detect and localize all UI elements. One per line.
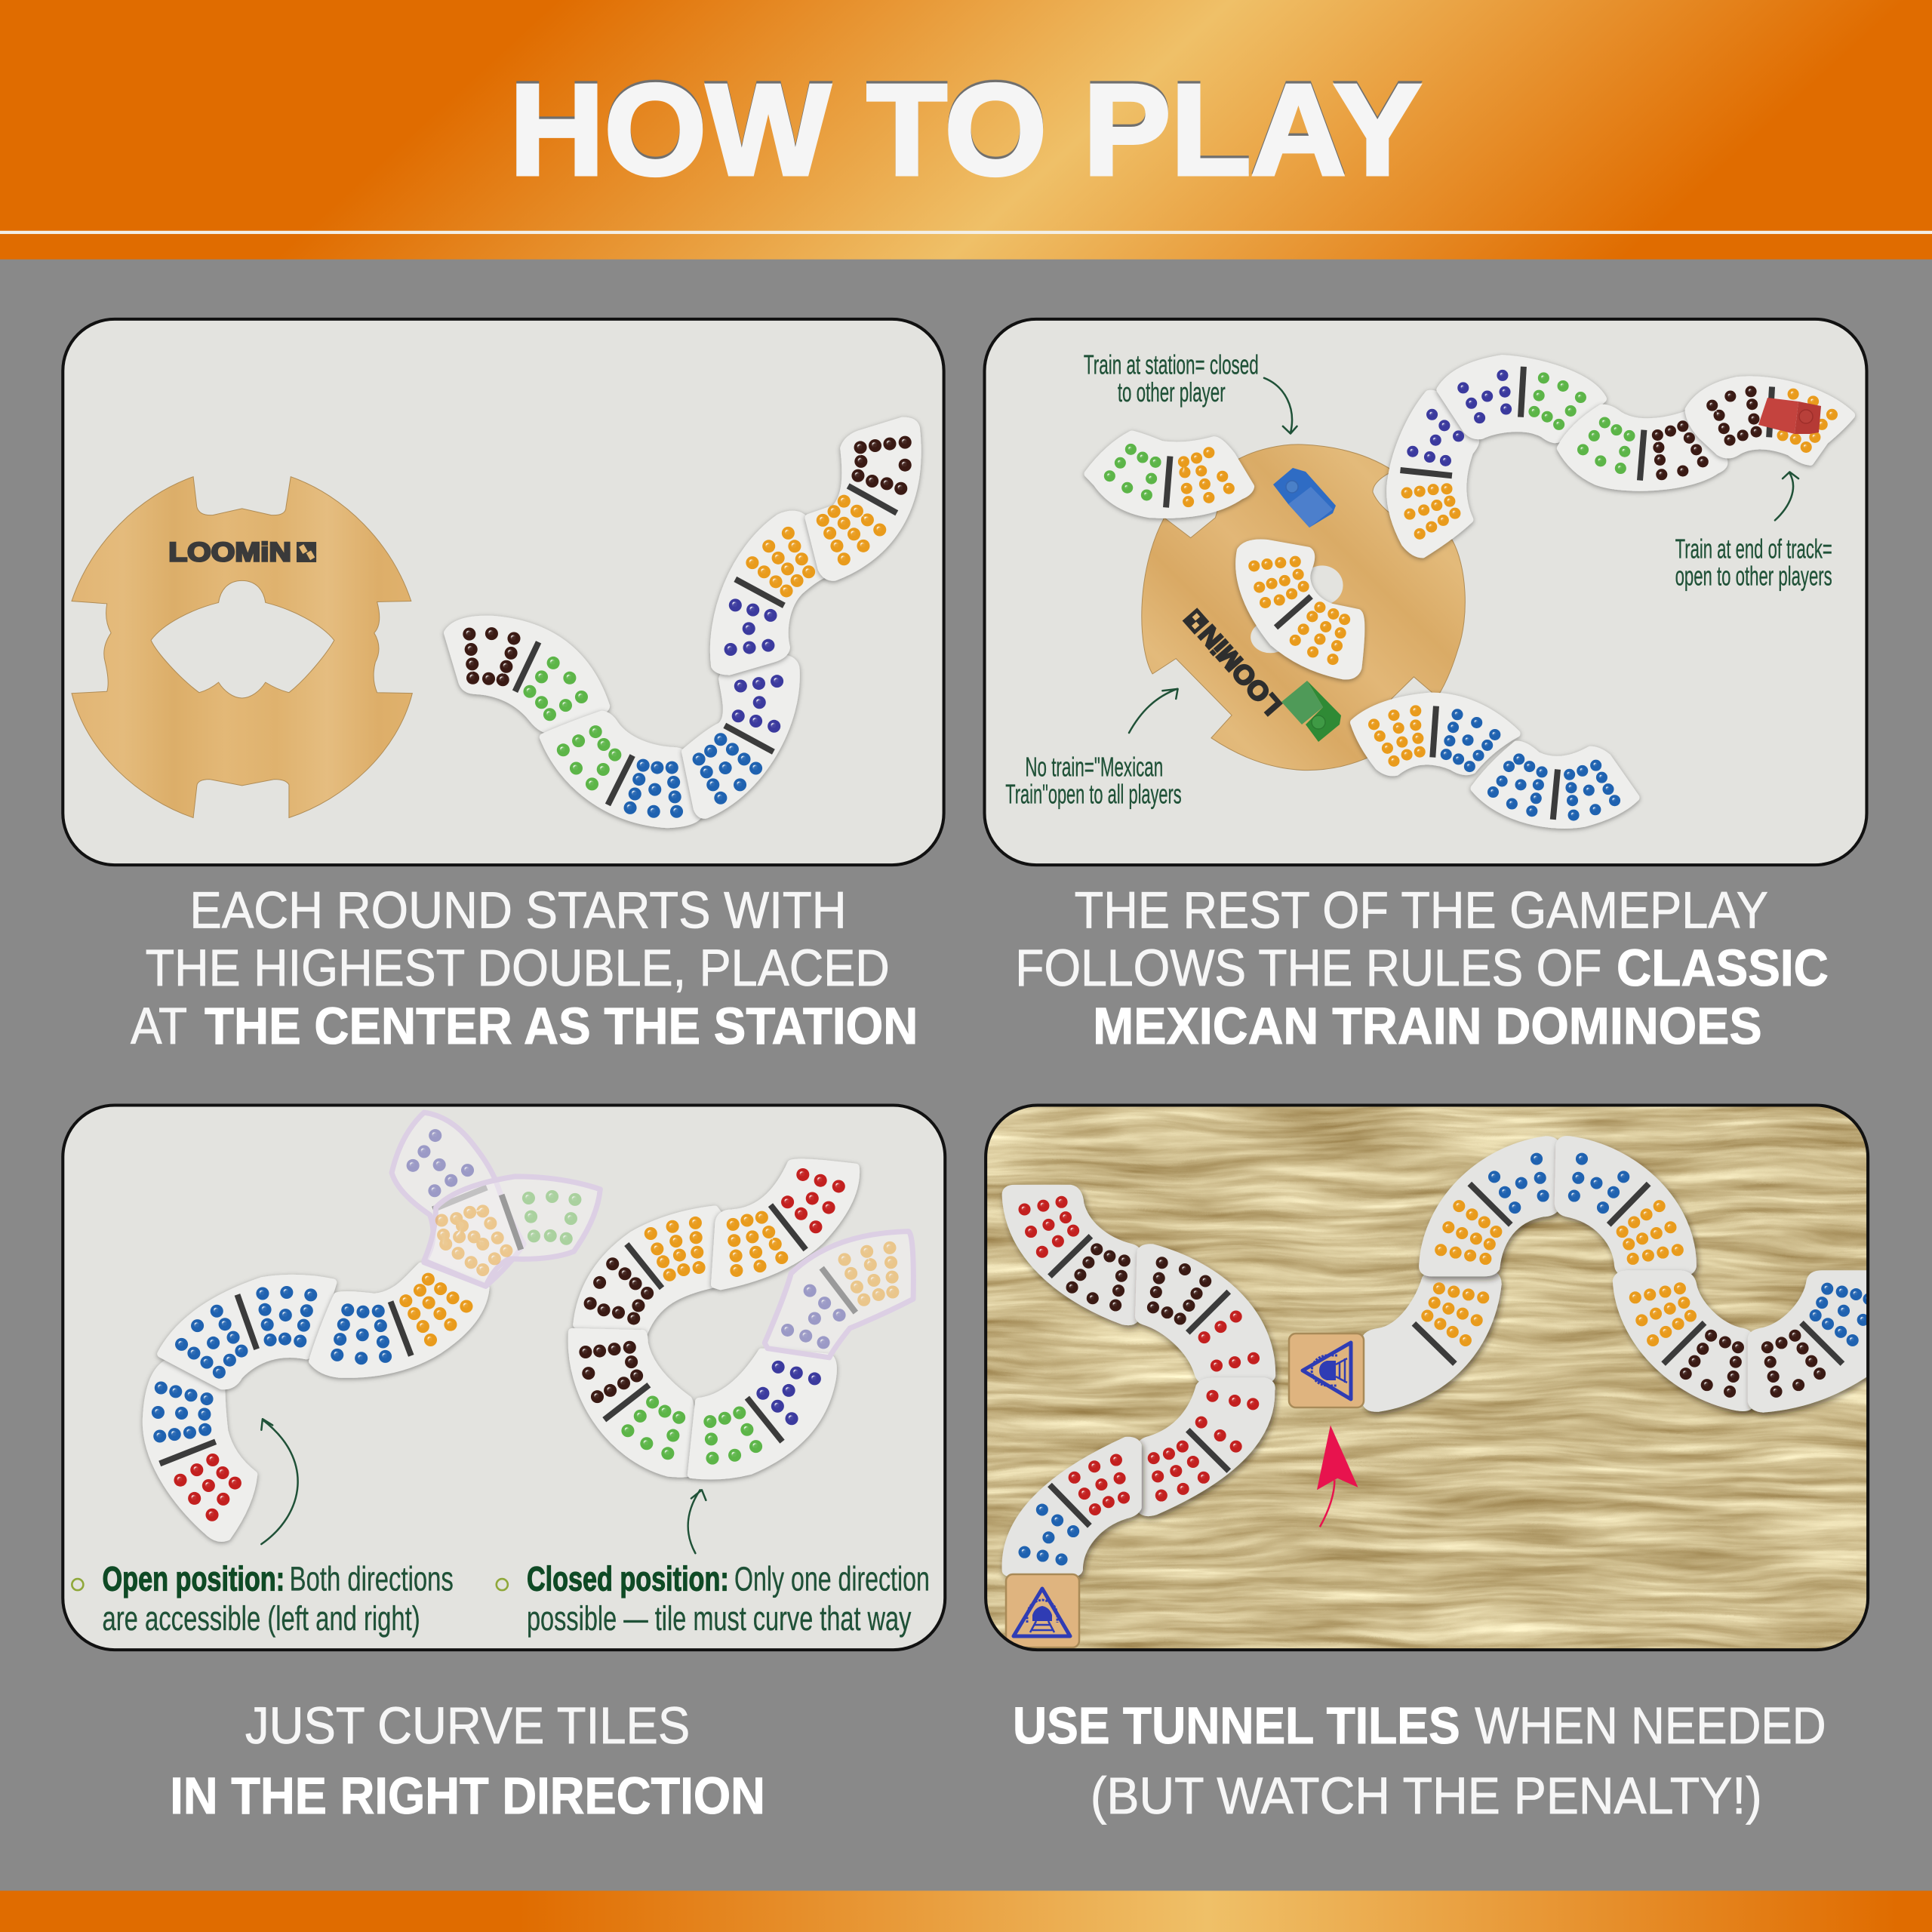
caption: panel 2: CLASSIC bbox=[1617, 939, 1829, 997]
panel: gameplay with trains bbox=[984, 319, 1866, 865]
tile: brown and green bbox=[448, 620, 606, 730]
text: open position: are accessible (left and right) bbox=[103, 1599, 420, 1638]
text: closed position: Only one direction bbox=[734, 1560, 930, 1598]
note: train at end of track: open to other players bbox=[1675, 561, 1832, 592]
text: closed position: possible — tile must curve that way bbox=[527, 1599, 911, 1638]
note: no train: No train="Mexican bbox=[1025, 752, 1163, 783]
ghost tiles: possible placements bbox=[392, 1112, 913, 1358]
caption: panel 2: FOLLOWS THE RULES OF bbox=[1015, 939, 1601, 997]
text: open position bbox=[103, 1560, 454, 1638]
tunnel tile: played bbox=[1289, 1334, 1364, 1407]
bullet: closed bbox=[497, 1579, 508, 1590]
ghost pips bbox=[413, 1136, 893, 1343]
tile: orange and red bbox=[715, 1162, 856, 1286]
panel: board and first tiles bbox=[63, 319, 944, 865]
bullet: open bbox=[72, 1579, 83, 1590]
tile: orange and blue bbox=[1354, 697, 1517, 772]
arrow: train at station bbox=[1264, 378, 1297, 434]
ghost tile: orange and green bbox=[424, 1177, 600, 1286]
tile: blue and red bbox=[146, 1364, 254, 1538]
arrow: no train bbox=[1129, 689, 1178, 733]
arrow: closed position bbox=[688, 1490, 706, 1553]
caption: panel 4 bbox=[1013, 1697, 1826, 1825]
wooden station board with logo bbox=[1142, 445, 1465, 771]
tile: brown and blue bbox=[1752, 1274, 1878, 1409]
caption: panel 2: MEXICAN TRAIN DOMINOES bbox=[1093, 997, 1762, 1055]
tile: orange and blue left bbox=[1423, 1140, 1556, 1272]
text: closed position: Closed position: bbox=[527, 1560, 729, 1598]
caption: panel 4: (BUT WATCH THE PENALTY!) bbox=[1091, 1767, 1762, 1825]
note: no train: Train"open to all players bbox=[1005, 778, 1182, 809]
tile: green and brown bbox=[1561, 408, 1724, 488]
tile: double blue bbox=[161, 1278, 333, 1386]
footer band bbox=[0, 1890, 1932, 1932]
domino pips bbox=[1109, 375, 1832, 815]
wood table background bbox=[980, 1099, 1874, 1656]
domino pips bbox=[469, 442, 905, 811]
note: no train bbox=[1005, 752, 1182, 809]
wooden station board bbox=[72, 421, 918, 824]
caption: panel 3 bbox=[170, 1697, 765, 1825]
ghost tile: orange and indigo bbox=[764, 1232, 913, 1358]
logo: LOOMiN: LOOMiN bbox=[168, 538, 291, 568]
text: closed position bbox=[527, 1560, 930, 1638]
header band bbox=[0, 0, 1932, 260]
caption: panel 2: THE REST OF THE GAMEPLAY bbox=[1075, 881, 1768, 939]
tile: green and orange bbox=[1088, 434, 1251, 515]
panel: tunnel tiles bbox=[980, 1099, 1878, 1656]
arrow: train at end of track bbox=[1775, 472, 1798, 520]
tile: brown and orange bbox=[1689, 380, 1851, 462]
icon: green train bbox=[1281, 681, 1341, 742]
caption: panel 1: EACH ROUND STARTS WITH bbox=[189, 881, 847, 939]
caption: panel 1: THE CENTER AS THE STATION bbox=[205, 997, 918, 1055]
note: train at station: to other player bbox=[1118, 377, 1226, 408]
domino pips bbox=[1024, 1159, 1869, 1559]
note: train at station: Train at station= closed bbox=[1084, 349, 1259, 380]
tile: orange and brown bbox=[809, 421, 918, 577]
tile: double blue bbox=[1475, 745, 1636, 825]
text: open position: Open position: bbox=[103, 1560, 285, 1598]
domino pips bbox=[158, 1174, 838, 1515]
tile: brown and red bbox=[1139, 1247, 1272, 1380]
caption: panel 2 bbox=[1015, 881, 1829, 1055]
tile: green and indigo bbox=[691, 1352, 833, 1476]
tile: indigo and blue bbox=[685, 659, 796, 815]
panel: curve direction bbox=[63, 1105, 945, 1650]
note: train at end of track: Train at end of track= bbox=[1675, 534, 1832, 565]
icon: red train bbox=[1758, 398, 1821, 434]
wooden station board with logo: LOOMiN bbox=[1193, 620, 1287, 720]
tile: indigo and orange bbox=[1390, 394, 1475, 554]
text: open position: Both directions bbox=[290, 1560, 454, 1598]
tunnel tile: start bbox=[1006, 1574, 1079, 1647]
ghost tile: indigo and orange bbox=[392, 1112, 524, 1286]
caption: panel 4: USE TUNNEL TILES bbox=[1013, 1697, 1460, 1755]
caption: panel 3: JUST CURVE TILES bbox=[245, 1697, 690, 1755]
tile: indigo and green bbox=[1440, 358, 1603, 439]
note: train at end of track bbox=[1675, 534, 1832, 592]
caption: panel 3: IN THE RIGHT DIRECTION bbox=[170, 1767, 765, 1825]
tile: blue and orange bbox=[312, 1266, 486, 1374]
tile: orange and brown bbox=[1617, 1274, 1749, 1407]
caption: panel 4: WHEN NEEDED bbox=[1475, 1697, 1826, 1755]
tile: blue and red bbox=[1006, 1441, 1138, 1574]
tile: green and blue bbox=[543, 715, 700, 824]
arrow: open position bbox=[261, 1419, 298, 1544]
caption: panel 1: THE HIGHEST DOUBLE, PLACED bbox=[146, 939, 890, 997]
caption: panel 1 bbox=[131, 881, 918, 1055]
tile: red and red bbox=[1140, 1381, 1272, 1512]
tile: indigo and orange bbox=[714, 515, 823, 672]
arrow: red pointer bbox=[1317, 1425, 1358, 1527]
title: HOW TO PLAY bbox=[509, 58, 1421, 202]
icon: blue train bbox=[1273, 468, 1336, 528]
tile: brown and orange bbox=[577, 1209, 719, 1334]
tile: red and brown bbox=[1006, 1189, 1138, 1321]
note: train at station bbox=[1084, 349, 1259, 408]
tile: center double orange bbox=[1239, 543, 1361, 676]
tile: brown and green bbox=[572, 1332, 691, 1474]
caption: panel 1: AT bbox=[131, 997, 187, 1055]
tile: blue and orange right bbox=[1558, 1140, 1693, 1272]
tile: blank and orange bbox=[1366, 1274, 1498, 1408]
